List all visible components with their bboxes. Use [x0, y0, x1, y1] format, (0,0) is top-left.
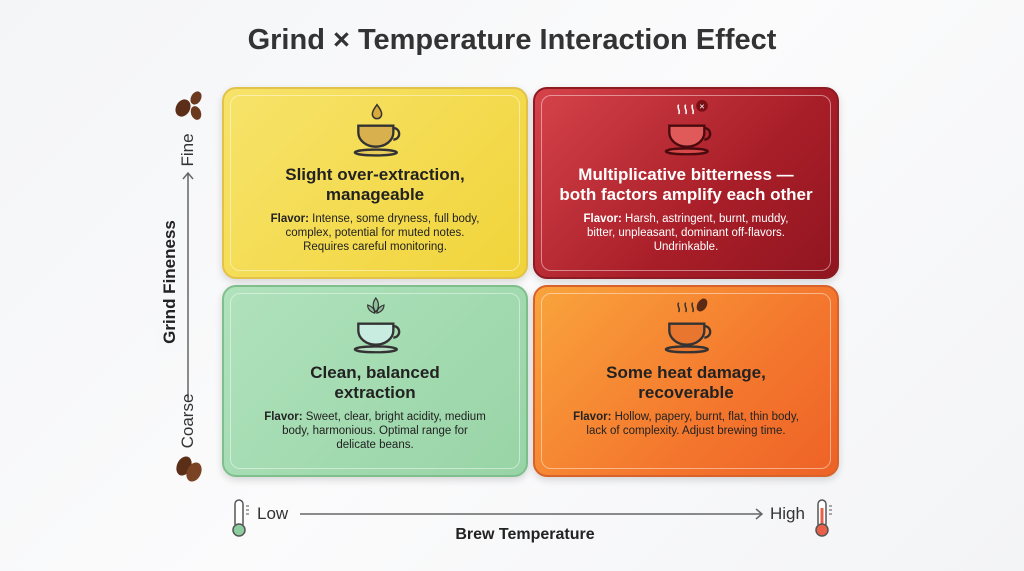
heading: Some heat damage,	[606, 363, 766, 382]
heading: Multiplicative bitterness —	[578, 165, 794, 184]
panel: fine high	[533, 87, 839, 279]
icon: cracked cup	[664, 100, 712, 156]
label: Grind Fineness: Grind Fineness	[160, 220, 179, 344]
heading	[559, 165, 813, 204]
label: Coarse: Coarse	[178, 394, 197, 448]
icon: cup with bean	[664, 298, 712, 354]
icon: beans top	[175, 91, 202, 120]
text: Flavor: Hollow, papery, burnt, flat, thin body, lack of complexity. Adjust brewing time.	[573, 411, 799, 437]
label: High: High	[770, 504, 805, 523]
y axis	[160, 91, 202, 482]
arrow: grind	[182, 172, 194, 398]
title: Grind × Temperature Interaction Effect	[248, 24, 776, 56]
heading	[285, 165, 465, 204]
text: Flavor: Harsh, astringent, burnt, muddy, bitter, unpleasant, dominant off-flavors. Undrinkable.	[584, 213, 788, 253]
label: Grind Fineness	[155, 212, 185, 352]
heading	[310, 363, 440, 402]
heading: Clean, balanced	[310, 363, 440, 382]
icon: thermometer high	[815, 499, 832, 537]
icon: cup with drop	[354, 104, 400, 157]
arrow: temperature	[300, 508, 763, 520]
heading: Slight over-extraction,	[285, 165, 465, 184]
heading	[606, 363, 766, 402]
label: Low: Low	[257, 504, 288, 523]
icon: cracked cup: ×	[699, 101, 705, 111]
panel: coarse low	[222, 285, 528, 477]
icon: cup with leaves	[354, 297, 400, 354]
text: Flavor: Intense, some dryness, full body, complex, potential for muted notes. Requires careful monitoring.	[271, 213, 479, 253]
icon: beans bottom	[176, 456, 202, 482]
heading: both factors amplify each other	[559, 185, 813, 204]
heading: extraction	[334, 383, 416, 402]
label: Fine: Fine	[178, 133, 197, 167]
panel: fine low	[222, 87, 528, 279]
heading: manageable	[326, 185, 424, 204]
heading: recoverable	[638, 383, 734, 402]
icon: thermometer low	[232, 499, 249, 537]
x axis	[232, 499, 832, 543]
label: Brew Temperature: Brew Temperature	[455, 526, 595, 543]
text: Flavor: Sweet, clear, bright acidity, medium body, harmonious. Optimal range for delicate beans.	[264, 411, 486, 451]
panel: coarse high	[533, 285, 839, 477]
